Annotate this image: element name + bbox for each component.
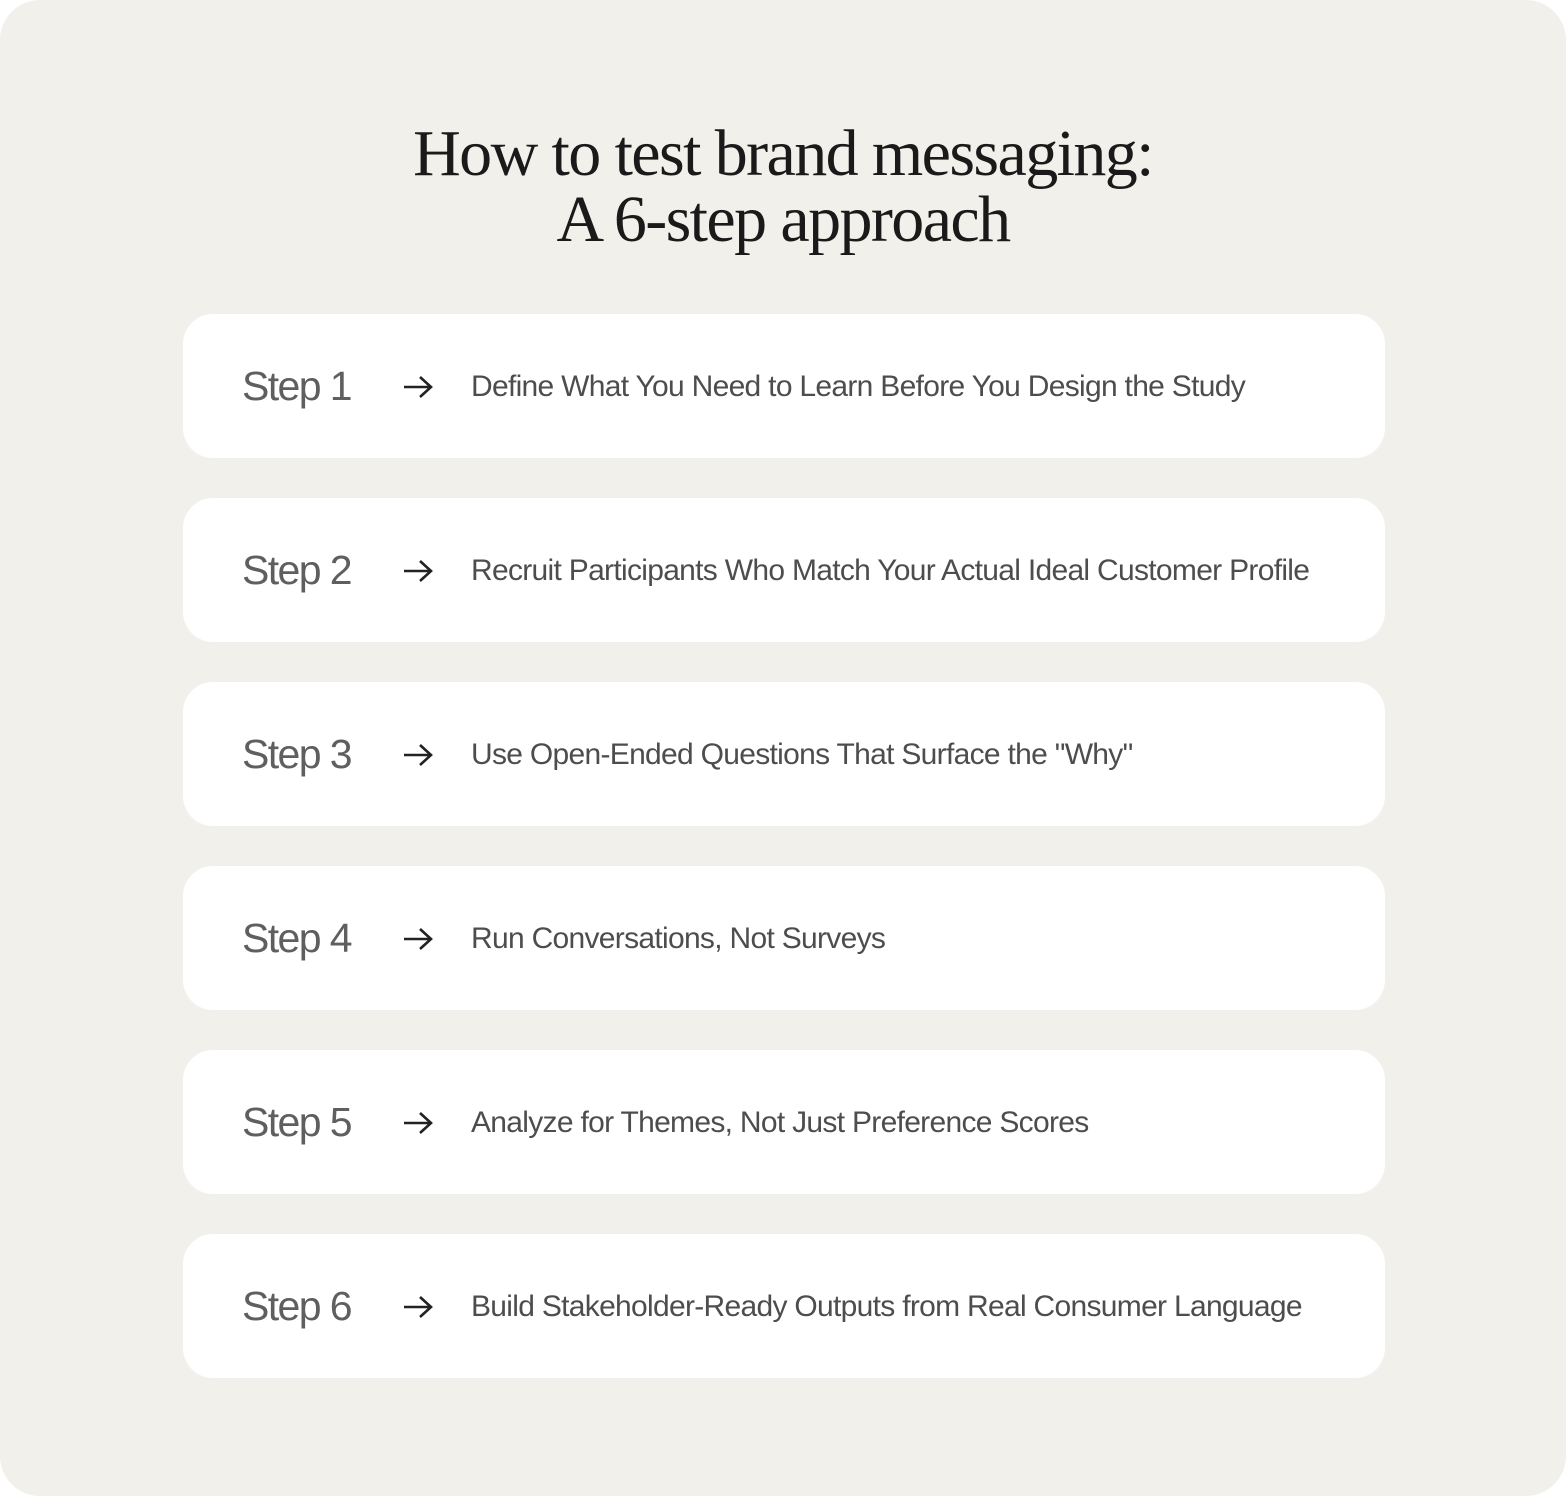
icon: arrow (404, 1296, 433, 1318)
card: step 4 (183, 866, 1385, 1010)
title (413, 117, 1153, 256)
card: step 3 (183, 682, 1385, 826)
icon: arrow (404, 744, 433, 766)
icon: arrow (404, 376, 433, 398)
title: A 6-step approach (556, 183, 1009, 256)
card: step 4: Run Conversations, Not Surveys (471, 922, 885, 955)
card: step 2: Step 2 (242, 547, 351, 593)
title: How to test brand messaging: (413, 117, 1153, 190)
card: step 4: Step 4 (242, 915, 351, 961)
card: step 3: Use Open-Ended Questions That Surface the "Why" (471, 738, 1133, 771)
card: step 5 (183, 1050, 1385, 1194)
card: step 1 (183, 314, 1385, 458)
card: step 6: Step 6 (242, 1283, 351, 1329)
card: step 6: Build Stakeholder-Ready Outputs from Real Consumer Language (471, 1290, 1302, 1323)
card: step 5: Analyze for Themes, Not Just Preference Scores (471, 1106, 1089, 1139)
card: step 2: Recruit Participants Who Match Your Actual Ideal Customer Profile (471, 554, 1309, 587)
card: step 1: Step 1 (242, 363, 351, 409)
card: step 3: Step 3 (242, 731, 351, 777)
card: step 6 (183, 1234, 1385, 1378)
card: step 5: Step 5 (242, 1099, 351, 1145)
card: step 2 (183, 498, 1385, 642)
icon: arrow (404, 560, 433, 582)
icon: arrow (404, 928, 433, 950)
card: step 1: Define What You Need to Learn Before You Design the Study (471, 370, 1245, 403)
icon: arrow (404, 1112, 433, 1134)
